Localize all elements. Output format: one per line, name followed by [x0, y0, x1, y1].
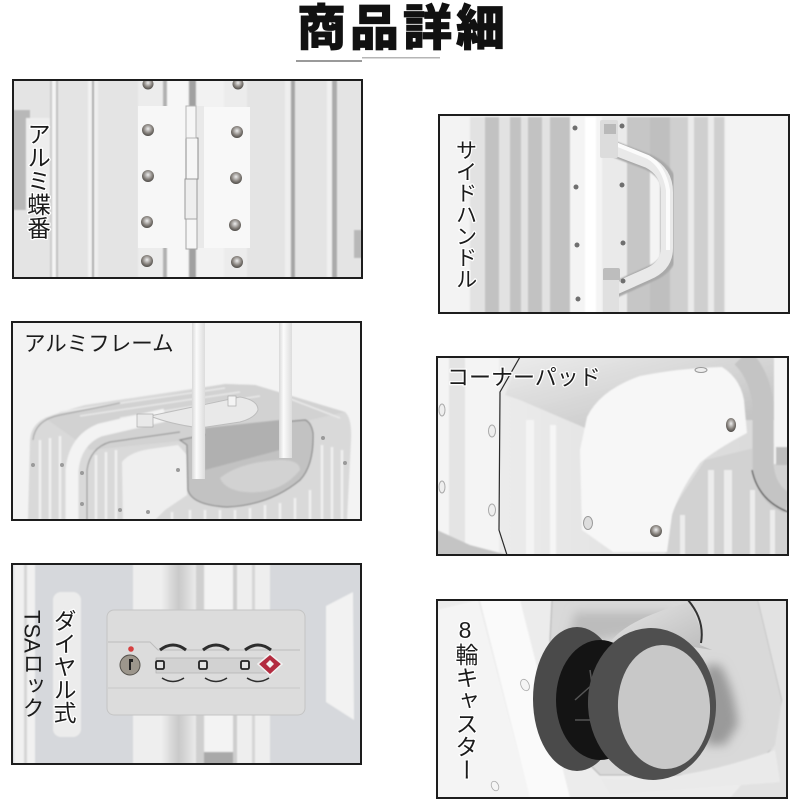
label: dial type: ダイヤル式 [50, 609, 76, 724]
grey frame band [742, 357, 788, 503]
frame edge line [499, 357, 520, 555]
panel: TSA dial lock [12, 564, 361, 764]
label: TSA lock: TSAロック [20, 610, 44, 719]
panel: aluminum hinge [13, 78, 362, 278]
white corner pad [580, 367, 747, 552]
caster fork [614, 601, 712, 650]
front wheel [584, 625, 720, 783]
body rivets [490, 678, 531, 792]
label: corner pad: コーナーパッド [447, 365, 601, 390]
handle rivets [572, 124, 626, 302]
label: 8-wheel casters: 8輪キャスター [452, 617, 478, 781]
panel: corner pad [437, 357, 788, 555]
dial windows [156, 661, 249, 669]
label: aluminum hinge: アルミ蝶番 [24, 122, 51, 240]
lock body [107, 610, 305, 715]
title: 商品詳細 [297, 2, 505, 56]
key cylinder [120, 646, 140, 675]
luggage tag plate [137, 396, 258, 428]
grey handle recess [180, 420, 313, 507]
label: aluminum frame: アルミフレーム [24, 332, 174, 356]
panel: aluminum frame [12, 322, 361, 520]
panel: 8-wheel casters [437, 600, 787, 798]
rivets [141, 78, 244, 268]
suitcase body [28, 384, 351, 520]
corner rivets [439, 368, 736, 537]
TSA logo [258, 654, 282, 675]
frame rivets [31, 436, 347, 514]
panel: side handle [439, 115, 789, 313]
side handle bar [600, 120, 670, 313]
hinge plates [138, 106, 250, 249]
label: side handle: サイドハンドル [453, 139, 477, 290]
rear wheel [533, 627, 614, 771]
dial arcs [160, 645, 271, 682]
telescopic handle poles [192, 322, 292, 479]
